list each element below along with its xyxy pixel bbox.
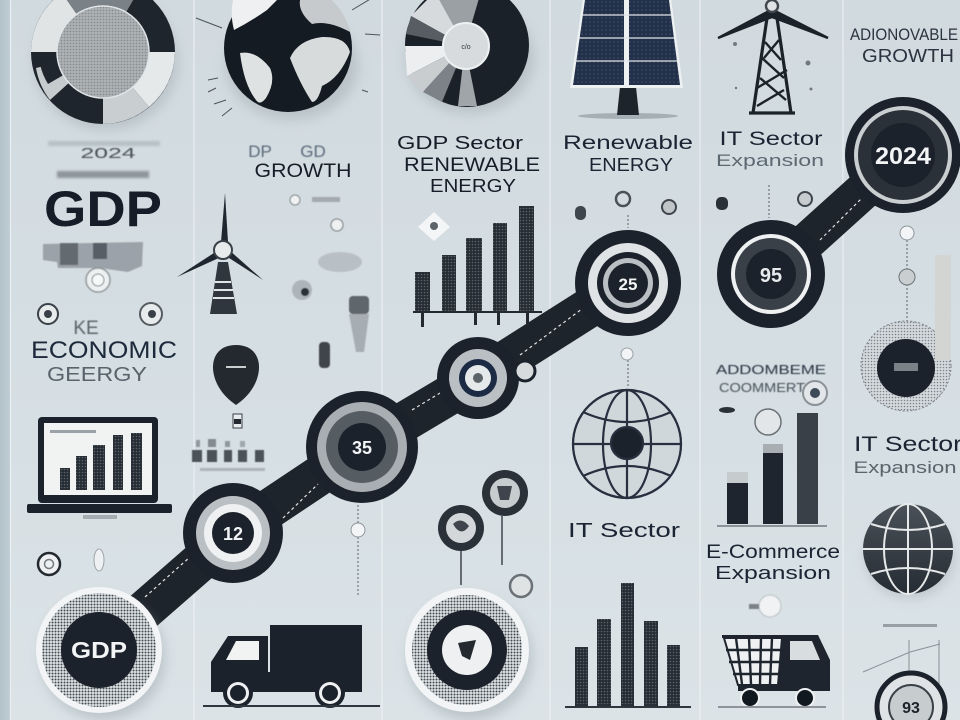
text: KE: KE — [73, 318, 99, 339]
icon: balloon — [213, 345, 259, 428]
pin connectors — [358, 185, 907, 597]
text: IT Sector: IT Sector — [568, 520, 680, 542]
heading: GDP Sector Renewable Energy — [397, 133, 540, 196]
icon: left pin badge — [438, 505, 484, 585]
milestone: 12 node: 12 — [223, 524, 243, 544]
icon: pin badge — [482, 470, 528, 565]
heading: E-Commerce Expansion — [706, 542, 840, 583]
heading: blurred e-commerce label: COOMMERT — [719, 380, 805, 395]
milestone: 35 node: 35 — [352, 438, 372, 458]
icon: solar panel — [570, 0, 683, 119]
heading: GDP Sector Renewable Energy: RENEWABLE — [404, 155, 540, 176]
heading: IT Sector Expansion right: Expansion — [854, 458, 956, 477]
milestone: lower centre node — [405, 588, 532, 720]
panel: segmented disc chart — [31, 0, 178, 130]
timeline band — [99, 155, 903, 650]
milestone: small node — [437, 337, 535, 419]
mesh centre — [57, 6, 149, 98]
milestone: lower right node: 93 — [902, 700, 920, 717]
icon: shopping cart truck — [718, 635, 830, 708]
icon: wire globe — [573, 390, 681, 498]
heading: IT Sector Expansion: IT Sector — [720, 129, 823, 150]
icons: scattered marks in growth column — [290, 195, 369, 368]
heading: 2024 subtitle — [48, 141, 160, 178]
heading: GDP GROWTH: GROWTH — [254, 161, 352, 182]
bar chart: IT sector — [565, 583, 691, 708]
milestone: 95 node — [717, 220, 825, 328]
milestone: 35 node — [306, 391, 418, 503]
icon: e-commerce badges — [719, 381, 827, 435]
left edge strip — [0, 0, 10, 720]
heading: E-Commerce Expansion: Expansion — [715, 563, 831, 583]
heading: IT Sector Expansion — [716, 129, 824, 170]
icon: laptop chart — [27, 417, 172, 519]
icon: small ring — [510, 575, 532, 597]
heading: E-Commerce Expansion: E-Commerce — [706, 542, 840, 563]
right vertical bar — [935, 255, 951, 360]
icon: smudged gear cluster — [43, 242, 143, 292]
heading: GDP GROWTH: DP — [248, 142, 272, 161]
text: GEERGY: GEERGY — [47, 364, 147, 386]
icons: expansion marks — [716, 192, 812, 210]
icons: mini bar row — [192, 439, 265, 471]
chart: lower right trend line — [863, 640, 940, 685]
text: faint caption — [883, 624, 937, 627]
milestone: 25 node: 25 — [619, 275, 637, 294]
heading: Renewable Energy: ENERGY — [589, 155, 673, 175]
heading: blurred e-commerce label — [716, 362, 826, 395]
timeline stitching — [145, 198, 862, 597]
milestone: GDP start node — [36, 587, 165, 720]
milestone: 2024 node: 2024 — [875, 143, 932, 170]
heading: IT Sector Expansion right — [854, 433, 960, 477]
heading: Renewable Energy: Renewable — [563, 133, 693, 154]
milestone: 2024 node — [845, 97, 960, 213]
icons: renewable marks — [575, 192, 676, 220]
icon: small badge above cart — [749, 595, 781, 617]
heading: GDP Sector Renewable Energy: GDP Sector — [397, 133, 523, 153]
icons: small badges — [38, 303, 162, 325]
text: 2024 label: 2024 — [80, 145, 136, 162]
milestone: lower right node — [877, 673, 945, 720]
heading: GDP GROWTH: GD — [300, 142, 326, 161]
bar chart: e-commerce — [717, 413, 827, 527]
bar chart: renewable energy — [413, 206, 542, 327]
heading: Adjustable Growth: GROWTH — [862, 46, 954, 66]
heading: GDP Sector Renewable Energy: ENERGY — [430, 176, 516, 196]
icon: diamond badge — [418, 212, 450, 241]
milestone: GDP start node: GDP — [71, 637, 127, 663]
panel: radial wedge chart — [405, 0, 534, 114]
icon: wind tower — [718, 0, 828, 113]
heading: IT Sector Expansion: Expansion — [716, 151, 824, 170]
panel: radial wedge chart: c/o — [461, 44, 471, 51]
panel: world globe — [196, 0, 380, 120]
icon: delivery truck — [203, 625, 380, 708]
wedge chart hub — [443, 23, 489, 69]
heading: ECONOMIC: ECONOMIC — [31, 337, 177, 364]
milestone: 95 node: 95 — [760, 265, 782, 287]
icon: dark globe — [863, 504, 954, 598]
heading: IT Sector Expansion right: IT Sector — [854, 433, 960, 456]
heading: blurred e-commerce label: ADDOMBEME — [716, 362, 826, 377]
heading: Adjustable Growth — [850, 25, 958, 66]
icon: wind turbine — [177, 193, 263, 314]
heading: GDP GROWTH — [248, 142, 352, 182]
milestone: 25 node — [575, 230, 681, 336]
milestone: 12 node — [183, 483, 283, 583]
heading: GDP: GDP — [44, 181, 162, 237]
panel: right gauge — [861, 321, 951, 411]
heading: Renewable Energy — [563, 133, 693, 175]
pins — [351, 226, 915, 537]
icons: small marks lower left — [38, 549, 104, 575]
